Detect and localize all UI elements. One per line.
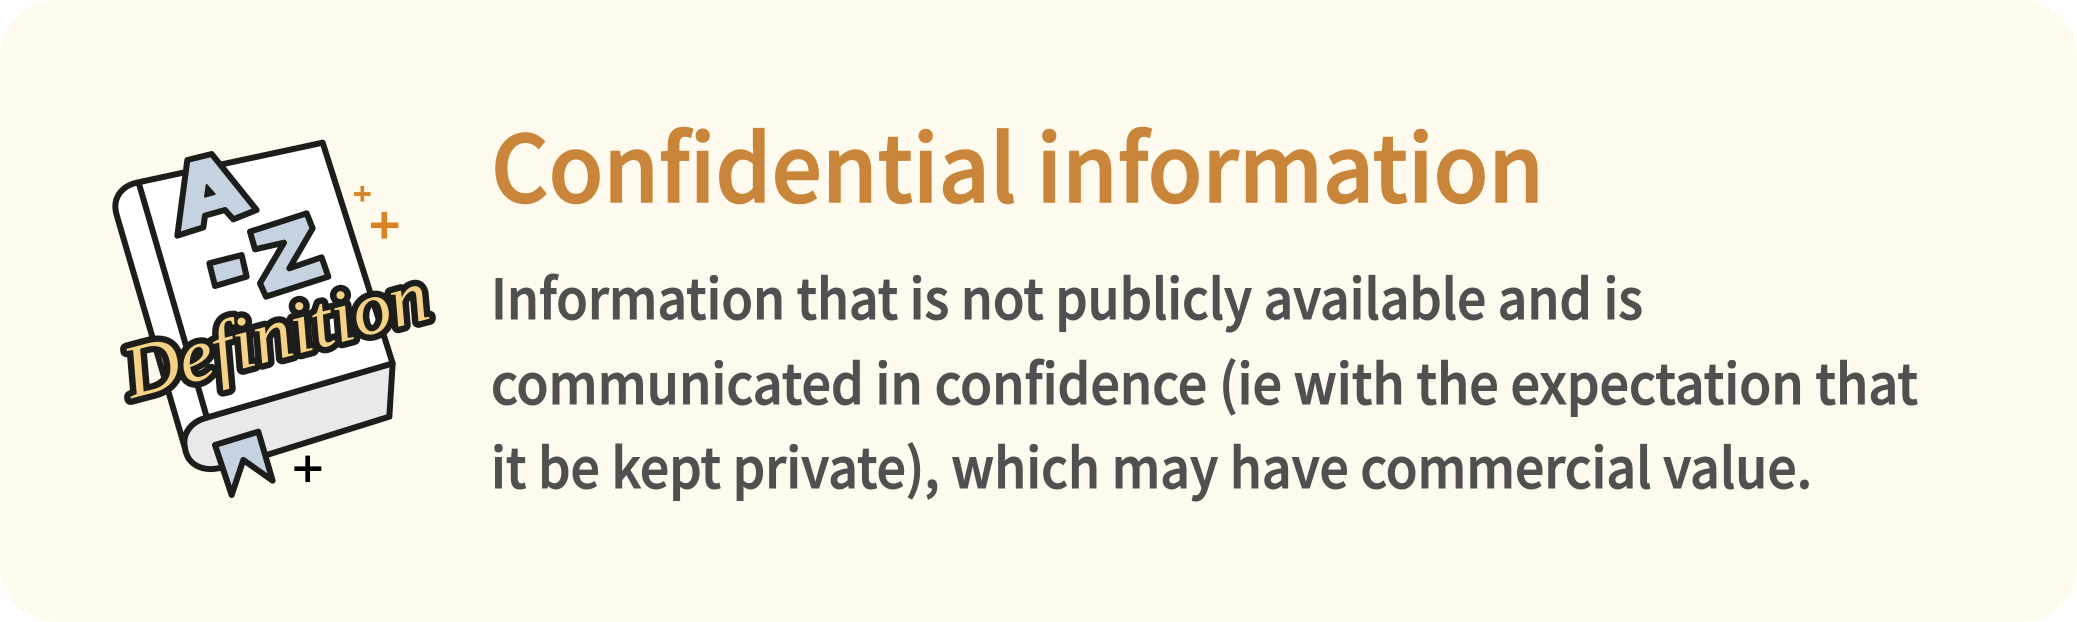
- letter A: [177, 154, 257, 236]
- sparkle: black plus: [294, 456, 321, 482]
- letter A counter: [205, 185, 215, 197]
- definition text: [491, 255, 1918, 504]
- sparkle: large orange plus: [371, 212, 398, 239]
- line 3: it be kept private), which may have commercial value.: [491, 424, 1812, 504]
- hyphen: [209, 255, 247, 286]
- book pages block: [184, 363, 393, 469]
- line 2: communicated in confidence (ie with the expectation that: [491, 340, 1918, 420]
- icon: definition book: [114, 143, 437, 495]
- line 1: Information that is not publicly available and is: [491, 255, 1643, 335]
- sparkle: small orange plus: [354, 186, 371, 202]
- bookmark ribbon: [215, 432, 273, 495]
- book cover: [115, 143, 393, 448]
- book spine line: [139, 185, 207, 417]
- letter Z: [250, 213, 328, 297]
- title: Confidential information: [491, 96, 1544, 229]
- Definition script lettering: Definition: [114, 254, 437, 415]
